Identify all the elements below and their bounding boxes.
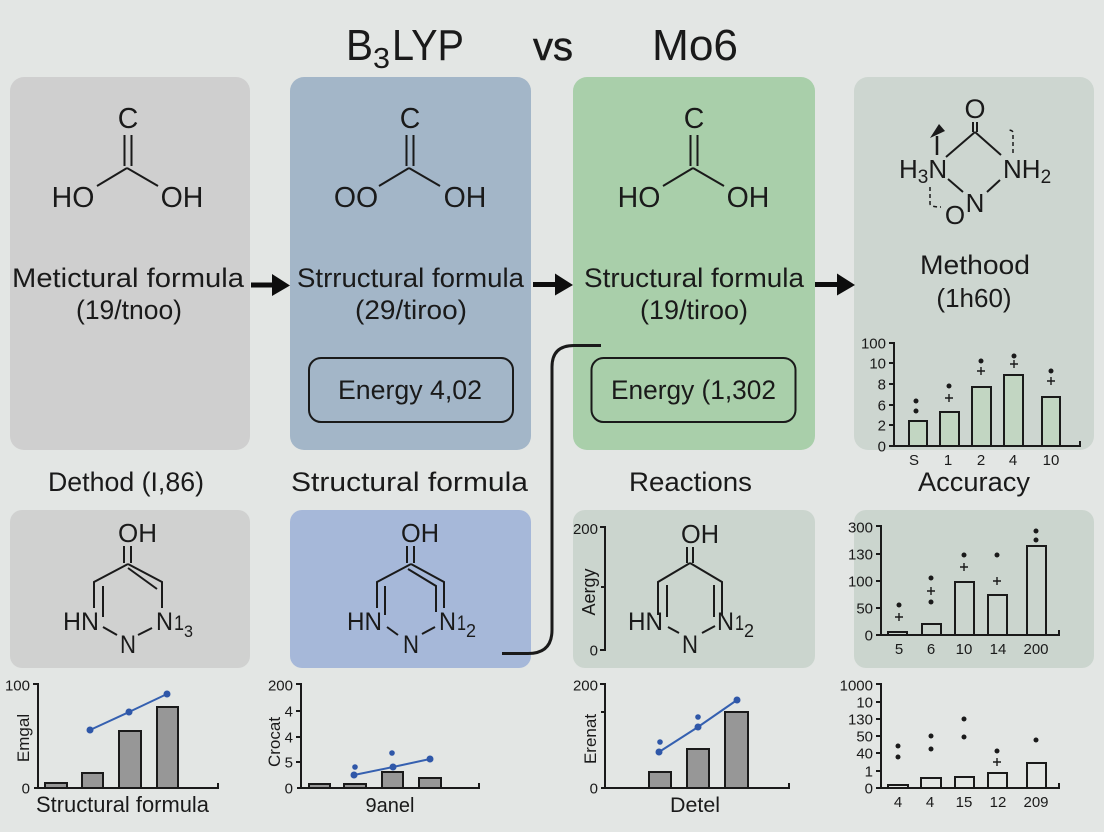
bar chart: bottom second: 0 — [285, 780, 293, 798]
icon: carbonic molecule green: OH — [727, 182, 769, 214]
bar chart: bottom right: 15 — [956, 794, 972, 811]
title: 3 — [373, 43, 390, 75]
icon: carbonic molecule blue — [334, 103, 486, 214]
text: right panel label: Methood — [920, 250, 1030, 280]
title: Mo6 — [652, 21, 738, 70]
bar chart: middle right: 50 — [856, 600, 873, 618]
icon: ring molecule blue: OH — [401, 518, 439, 548]
bar chart: middle right: 300 — [848, 520, 873, 536]
chart axis: Aergy: 0 — [590, 642, 598, 660]
bar chart: bottom third: Detel — [670, 794, 720, 817]
icon: carbonic molecule gray — [52, 103, 203, 214]
bar chart: bottom third: Erenat — [581, 714, 600, 764]
chart axis: Aergy: Aergy — [579, 568, 599, 616]
text: gray panel label — [12, 263, 245, 325]
bar chart: middle right: 0 — [865, 628, 873, 644]
bar chart: bottom second: 200 — [268, 678, 293, 694]
icon: ring molecule green: 1 — [735, 612, 744, 635]
bar chart: top right green: 8 — [878, 376, 886, 394]
icon: carbonic molecule blue: OO — [334, 182, 378, 214]
icon: carbonic molecule blue: C — [400, 103, 420, 135]
chart axis: Aergy: 200 — [573, 521, 598, 538]
icon: ring molecule gray — [63, 518, 193, 659]
icon: ring molecule blue: 1 — [457, 612, 466, 635]
text: blue panel label — [297, 263, 525, 325]
icon: carbonic molecule gray: HO — [52, 182, 94, 214]
bar chart: top right green: 2 — [977, 452, 985, 469]
bar chart: middle right: 14 — [990, 641, 1006, 658]
icon: ring molecule blue: HN — [347, 608, 382, 636]
icon: ring molecule gray: 3 — [184, 622, 193, 641]
icon: ring molecule blue: 2 — [466, 621, 476, 641]
icon: ring molecule blue: N — [439, 608, 456, 636]
bar chart: top right green: 1 — [944, 452, 952, 469]
bar chart: bottom left: 100 — [5, 678, 30, 694]
icon: ring molecule green: N — [717, 608, 734, 636]
bar chart: bottom right: 1 — [865, 764, 873, 780]
bar chart: bottom right: 0 — [865, 780, 873, 798]
bar chart: bottom left — [5, 678, 218, 817]
panel: right method — [854, 77, 1094, 469]
text: blue panel label: (29/tiroo) — [355, 295, 467, 325]
heading: row two: Structural formula — [291, 467, 529, 497]
bar chart: top right green — [861, 336, 1080, 469]
bar chart: middle right: 100 — [848, 574, 873, 590]
arrow: blue to green — [533, 274, 573, 296]
arrow: green to right — [815, 274, 855, 296]
bar chart: middle right: 200 — [1023, 641, 1049, 658]
callout: energy blue — [309, 358, 513, 422]
heading: row two: Accuracy — [918, 467, 1030, 497]
bar chart: top right green: 2 — [878, 418, 886, 434]
bar chart: bottom second: 9anel — [366, 795, 414, 817]
icon: ring molecule with arrow: N — [928, 154, 947, 184]
text: right panel label: (1h60) — [936, 283, 1012, 313]
text: gray panel label: Metictural formula — [12, 263, 245, 293]
bar chart: bottom right: 12 — [990, 794, 1006, 811]
bar chart: bottom right: 50 — [856, 728, 873, 746]
icon: ring molecule with arrow: 3 — [918, 167, 928, 188]
bar chart: middle right: 10 — [956, 641, 972, 658]
bar chart: top right green: 0 — [878, 438, 886, 456]
icon: ring molecule gray: N — [156, 608, 173, 636]
callout: energy green — [592, 358, 796, 422]
bar chart: top right green: 4 — [1009, 452, 1017, 469]
icon: carbonic molecule green — [618, 103, 769, 214]
bar chart: top right green: 10 — [1043, 452, 1059, 469]
bar chart: bottom second: 4 — [285, 704, 293, 720]
bar chart: bottom third: 200 — [573, 678, 598, 694]
title: vs — [533, 25, 573, 69]
bar chart: bottom left: 0 — [22, 780, 30, 798]
bar chart: bottom right: 209 — [1023, 794, 1049, 811]
icon: ring molecule green: OH — [681, 519, 719, 549]
bar chart: bottom right: 130 — [848, 712, 873, 728]
bar chart: bottom second: 5 — [285, 754, 293, 772]
bar chart: bottom right: 4 — [926, 794, 934, 811]
bar chart: bottom right — [840, 678, 1059, 811]
icon: ring molecule gray: OH — [118, 518, 157, 548]
bar chart: middle right: 130 — [848, 546, 873, 564]
title: LYP — [392, 21, 464, 70]
bar chart: middle right: 6 — [927, 641, 935, 658]
panel: green method — [573, 77, 815, 450]
panel: blue method — [290, 77, 531, 450]
callout: energy green: Energy (1,302 — [611, 375, 776, 405]
text: blue panel label: Strructural formula — [297, 263, 525, 293]
bar chart: middle right: 5 — [895, 641, 903, 658]
icon: ring molecule with arrow: H — [899, 154, 918, 184]
text: green panel label: Structural formula — [584, 263, 805, 293]
panel: gray method — [10, 77, 250, 450]
icon: ring molecule with arrow: O — [964, 94, 986, 124]
icon: ring molecule with arrow — [899, 94, 1051, 230]
bar chart: top right green: 100 — [861, 336, 886, 352]
panel: green ring — [573, 510, 815, 668]
icon: carbonic molecule green: C — [684, 103, 704, 135]
icon: ring molecule blue: N — [403, 631, 419, 659]
bar chart: bottom left: Emgal — [14, 714, 33, 762]
title — [346, 21, 738, 75]
bar chart: top right green: 6 — [878, 398, 886, 414]
bar chart: bottom right: 4 — [894, 794, 902, 811]
heading: row two: Reactions — [629, 467, 752, 497]
bar chart: bottom second: Crocat — [265, 717, 284, 767]
icon: ring molecule with arrow: N — [966, 188, 984, 218]
callout: energy blue: Energy 4,02 — [338, 375, 482, 405]
bar chart: bottom third: 0 — [590, 780, 598, 798]
bar chart: middle right — [848, 520, 1059, 658]
icon: carbonic molecule gray: OH — [161, 182, 203, 214]
bar chart: bottom right: 1000 — [840, 678, 873, 694]
text: right panel label — [920, 250, 1030, 313]
icon: ring molecule green — [628, 519, 754, 659]
chart axis: Aergy — [573, 521, 605, 660]
icon: ring molecule with arrow: 2 — [1041, 167, 1051, 188]
arrow: connector line — [502, 346, 601, 654]
text: green panel label: (19/tiroo) — [640, 295, 748, 325]
bar chart: bottom right: 10 — [856, 694, 873, 712]
panel: blue ring — [290, 510, 531, 668]
bar chart: bottom second — [265, 678, 479, 817]
panel: right bars — [848, 510, 1094, 668]
bar chart: bottom second: 4 — [285, 730, 293, 746]
icon: ring molecule gray: N — [120, 631, 136, 659]
heading: row two: Dethod (I,86) — [48, 467, 204, 497]
icon: ring molecule green: HN — [628, 608, 663, 636]
icon: carbonic molecule blue: OH — [444, 182, 486, 214]
icon: ring molecule green: N — [682, 631, 698, 659]
bar chart: top right green: 10 — [869, 356, 886, 372]
icon: carbonic molecule green: HO — [618, 182, 660, 214]
panel: gray ring — [10, 510, 250, 668]
icon: ring molecule with arrow: O — [945, 200, 965, 230]
icon: carbonic molecule gray: C — [118, 103, 138, 135]
icon: ring molecule green: 2 — [744, 621, 754, 641]
bar chart: bottom right: 40 — [856, 746, 873, 762]
title: B — [346, 21, 373, 70]
icon: ring molecule blue — [347, 518, 476, 659]
bar chart: top right green: S — [909, 452, 919, 469]
arrow: gray to blue — [251, 274, 290, 296]
heading: row two — [48, 467, 1030, 497]
bar chart: bottom left: Structural formula — [36, 792, 210, 817]
icon: ring molecule with arrow: NH — [1003, 154, 1041, 184]
bar chart: bottom third — [573, 678, 789, 817]
text: green panel label — [584, 263, 805, 325]
icon: ring molecule gray: HN — [63, 608, 99, 636]
text: gray panel label: (19/tnoo) — [76, 295, 182, 325]
icon: ring molecule gray: 1 — [174, 612, 184, 635]
